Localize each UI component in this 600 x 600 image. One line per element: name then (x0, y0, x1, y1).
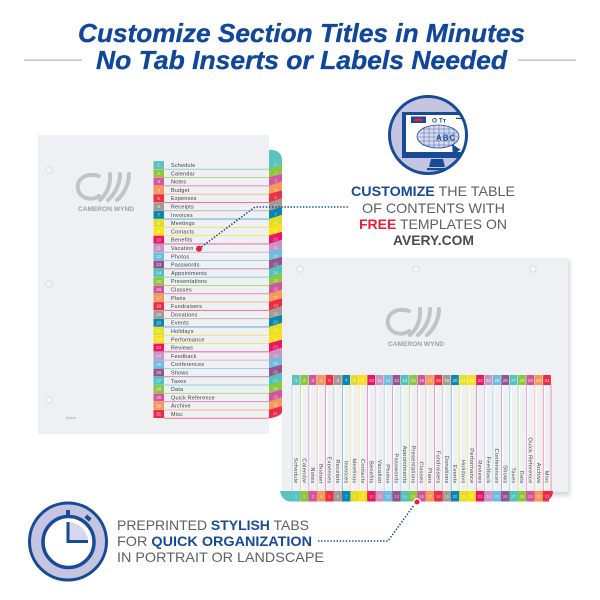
landscape tabs: 24 (486, 378, 492, 383)
portrait table of contents rows: 19 (273, 311, 278, 316)
portrait table of contents rows: Holidays (171, 329, 194, 335)
landscape tabs: 3 (311, 378, 314, 383)
landscape tabs: Reviews (476, 460, 482, 484)
landscape tabs: Archive (535, 463, 541, 484)
arrow: dotted leader from Vacation to customize text (199, 207, 348, 249)
landscape tabs: 22 (469, 378, 475, 383)
landscape tabs: Fundraisers (434, 451, 440, 484)
portrait table of contents rows: 3 (157, 179, 160, 184)
portrait table of contents rows: 28 (156, 387, 162, 392)
portrait table of contents rows: Misc (171, 412, 183, 418)
portrait table of contents rows: 21 (156, 329, 162, 334)
landscape tabs: 24 (486, 494, 492, 499)
logo: landscape: CAMERON WYND (388, 341, 444, 348)
portrait table of contents rows: Presentations (171, 279, 207, 285)
portrait table of contents rows: 18 (273, 303, 278, 308)
portrait table of contents rows: 5 (157, 196, 160, 201)
landscape tabs: 9 (362, 494, 365, 499)
landscape tabs: Feedback (485, 457, 491, 484)
portrait table of contents rows: Fundraisers (171, 304, 202, 310)
portrait table of contents rows: 30 (156, 403, 162, 408)
landscape tabs: 1 (295, 378, 298, 383)
landscape tabs: 28 (520, 494, 525, 499)
landscape tabs: Budget (317, 464, 323, 484)
landscape tabs: 20 (453, 494, 458, 499)
portrait table of contents rows: 19 (156, 312, 162, 317)
portrait table of contents rows: Vacation (171, 246, 194, 252)
portrait table of contents rows: Notes (171, 180, 186, 186)
landscape tabs: Classes (418, 462, 424, 484)
icon: stopwatch (30, 503, 106, 580)
landscape tabs: Receipts (334, 459, 340, 484)
portrait table of contents rows: 23 (156, 345, 162, 350)
landscape tabs: Contacts (359, 459, 365, 484)
portrait table of contents rows: 21 (273, 328, 278, 333)
landscape tabs: 17 (428, 494, 433, 499)
portrait table of contents rows: Conferences (171, 362, 204, 368)
portrait table of contents rows: 29 (273, 394, 278, 399)
landscape tabs: 13 (394, 378, 399, 383)
landscape tabs: 20 (452, 378, 458, 383)
panel: portrait divider (38, 135, 282, 434)
landscape tabs: 8 (353, 378, 356, 383)
portrait table of contents rows: Benefits (171, 238, 193, 244)
landscape tabs: Presentations (409, 445, 415, 484)
portrait table of contents rows: 25 (156, 362, 162, 367)
landscape tabs: 1 (295, 494, 298, 499)
landscape tabs: 10 (369, 378, 374, 383)
portrait table of contents rows: 31 (273, 411, 278, 416)
portrait table of contents rows: 13 (273, 262, 278, 267)
text: customize callout: FREE TEMPLATES ON (359, 216, 507, 232)
arrow: dotted leader from tabs callout to bottom tab (318, 505, 414, 541)
landscape tabs: 19 (444, 378, 450, 383)
portrait table of contents rows: Reviews (171, 346, 193, 352)
landscape tabs: 14 (402, 494, 408, 499)
portrait table of contents rows: 4 (157, 187, 160, 192)
portrait table of contents rows: 16 (156, 287, 162, 292)
text: stylish tabs callout (117, 517, 324, 565)
landscape tabs: 12 (386, 378, 391, 383)
landscape tabs: Conferences (493, 448, 499, 484)
landscape tabs: Quick Reference (526, 437, 532, 484)
landscape tabs: 11 (377, 378, 383, 383)
text: customize callout (351, 183, 515, 248)
landscape tabs: Meetings (351, 458, 357, 484)
icon: computer monitor: O Tт (432, 118, 446, 124)
logo: portrait (78, 174, 134, 213)
portrait table of contents rows: 11 (156, 246, 162, 251)
portrait table of contents rows: Donations (171, 312, 198, 318)
portrait table of contents rows: 17 (273, 295, 278, 300)
portrait table of contents rows: 24 (273, 353, 278, 358)
landscape tabs: 16 (419, 378, 425, 383)
marker: red dot on Vacation (196, 246, 202, 252)
landscape tabs (280, 375, 553, 502)
portrait table of contents rows: Plans (171, 296, 186, 302)
landscape tabs: Data (518, 470, 524, 484)
portrait table of contents rows: 1 (274, 162, 277, 167)
portrait table of contents rows: 17 (156, 295, 162, 300)
landscape tabs: Shows (501, 465, 507, 484)
portrait table of contents rows: Contacts (171, 229, 194, 235)
portrait table of contents rows: Shows (171, 370, 188, 376)
landscape tabs: 29 (528, 378, 533, 383)
text: customize callout: AVERY.COM (393, 232, 474, 248)
portrait table of contents rows: 13 (156, 262, 162, 267)
landscape tabs: 30 (536, 378, 542, 383)
landscape tabs: 18 (436, 378, 441, 383)
portrait table of contents rows: Meetings (171, 221, 195, 227)
portrait table of contents rows: Events (171, 321, 189, 327)
portrait table of contents rows: Data (171, 387, 183, 393)
landscape tabs: 23 (478, 378, 483, 383)
landscape tabs: Misc (543, 471, 549, 484)
portrait table of contents rows: 27 (273, 378, 278, 383)
logo: landscape (388, 309, 444, 348)
landscape tabs: 28 (519, 378, 525, 383)
landscape tabs: 22 (469, 494, 475, 499)
portrait table of contents rows: Archive (171, 404, 191, 410)
portrait table of contents rows: 12 (273, 253, 278, 258)
portrait table of contents rows: 8 (157, 221, 160, 226)
portrait table of contents rows: Budget (171, 188, 190, 194)
landscape tabs: 7 (345, 494, 348, 499)
portrait table of contents rows: Passwords (171, 263, 200, 269)
portrait table of contents rows: 22 (156, 337, 162, 342)
portrait table of contents rows: Feedback (171, 354, 197, 360)
portrait table of contents rows: 24 (156, 353, 162, 358)
landscape tabs: 21 (461, 494, 466, 499)
text: customize callout: OF CONTENTS WITH (362, 200, 505, 216)
portrait table of contents rows: Photos (171, 254, 189, 260)
landscape tabs: 15 (411, 494, 416, 499)
landscape tabs: Donations (443, 456, 449, 484)
text: customize callout: CUSTOMIZE THE TABLE (351, 183, 515, 199)
portrait table of contents rows: 14 (156, 270, 162, 275)
portrait table of contents rows: 16 (273, 286, 278, 292)
landscape tabs: Notes (309, 467, 315, 484)
landscape tabs: 26 (503, 494, 508, 499)
portrait table of contents rows: 29 (156, 395, 162, 400)
landscape tabs: Appointments (401, 446, 407, 484)
portrait table of contents rows: 25 (273, 361, 278, 366)
landscape tabs: 15 (411, 378, 416, 383)
portrait table of contents rows: 2 (157, 171, 160, 176)
portrait table of contents rows: Invoices (171, 213, 193, 219)
portrait table of contents rows: 7 (274, 212, 277, 217)
portrait table of contents rows: Appointments (171, 271, 207, 277)
portrait table of contents rows: 27 (156, 378, 162, 383)
landscape tabs: 13 (394, 494, 399, 499)
portrait table of contents rows: Quick Reference (171, 395, 215, 401)
landscape tabs: Photos (384, 464, 390, 484)
portrait table of contents rows: 15 (156, 279, 162, 284)
portrait table of contents rows (154, 150, 282, 419)
portrait table of contents rows: 15 (273, 278, 278, 283)
portrait table of contents rows: Taxes (171, 379, 186, 385)
landscape tabs: 27 (511, 378, 517, 383)
portrait table of contents rows: 9 (157, 229, 160, 234)
landscape tabs: 2 (303, 494, 306, 499)
landscape tabs: 26 (503, 378, 508, 383)
landscape tabs: 5 (328, 494, 331, 499)
portrait table of contents rows: 14 (273, 270, 278, 275)
portrait table of contents rows: 10 (273, 237, 278, 242)
portrait table of contents rows: 5 (274, 195, 277, 200)
landscape tabs: 25 (495, 494, 500, 499)
small brand mark: Avery (66, 415, 76, 420)
landscape tabs: 23 (478, 494, 483, 499)
landscape tabs: Passwords (393, 453, 399, 484)
landscape tabs: 17 (427, 378, 433, 383)
portrait table of contents rows: 10 (156, 237, 162, 242)
landscape tabs: 5 (328, 378, 331, 383)
landscape tabs: 29 (528, 494, 533, 499)
text: stylish tabs callout: FOR QUICK ORGANIZATION (117, 533, 312, 549)
portrait table of contents rows: 2 (274, 170, 277, 175)
landscape tabs: 9 (362, 378, 365, 383)
icon: computer monitor: ABC (436, 134, 456, 142)
landscape tabs: 30 (536, 494, 542, 499)
landscape tabs: 21 (461, 378, 466, 383)
portrait table of contents rows: 23 (273, 345, 278, 350)
portrait table of contents rows: 31 (156, 412, 162, 417)
marker: red dot on bottom tab (414, 499, 420, 505)
title: Customize Section Titles in Minutes (78, 18, 525, 48)
panel: landscape divider (280, 258, 570, 502)
portrait table of contents rows: Calendar (171, 171, 195, 177)
portrait table of contents rows: 9 (274, 228, 277, 233)
portrait table of contents rows: 6 (274, 204, 277, 208)
landscape tabs: Invoices (342, 461, 348, 484)
portrait table of contents rows: 1 (157, 163, 160, 168)
portrait table of contents rows: 28 (273, 386, 278, 391)
portrait table of contents rows: 6 (157, 204, 160, 209)
landscape tabs: 31 (545, 494, 550, 499)
portrait table of contents rows: 22 (273, 336, 278, 341)
landscape tabs: Holidays (459, 460, 465, 484)
portrait table of contents rows: Receipts (171, 204, 194, 210)
portrait table of contents rows: Performance (171, 337, 205, 343)
portrait table of contents rows: Schedule (171, 163, 195, 169)
landscape tabs: 10 (369, 494, 374, 499)
landscape tabs: 6 (337, 494, 340, 499)
landscape tabs: 27 (511, 494, 517, 499)
landscape tabs: 25 (494, 378, 500, 383)
icon: computer monitor (390, 96, 472, 174)
landscape tabs: Benefits (367, 461, 373, 484)
portrait table of contents rows: Expenses (171, 196, 197, 202)
landscape tabs: 31 (545, 378, 550, 383)
portrait table of contents rows: 20 (273, 320, 278, 325)
landscape tabs: Calendar (300, 458, 306, 484)
landscape tabs: Performance (468, 448, 474, 484)
portrait table of contents rows: 12 (156, 254, 162, 259)
landscape tabs: 4 (320, 378, 323, 383)
landscape tabs: 11 (378, 494, 383, 499)
portrait table of contents rows: 30 (273, 403, 278, 408)
landscape tabs: 14 (402, 378, 408, 383)
portrait table of contents rows: 26 (156, 370, 162, 375)
landscape tabs: Taxes (510, 467, 516, 484)
landscape tabs: 18 (436, 494, 441, 499)
landscape tabs: Expenses (326, 457, 332, 484)
portrait table of contents rows: 7 (157, 212, 160, 217)
title (24, 18, 576, 75)
landscape tabs: 2 (303, 378, 306, 383)
text: stylish tabs callout: IN PORTRAIT OR LANDSCAPE (117, 549, 324, 565)
landscape tabs: 8 (353, 494, 356, 499)
landscape tabs: Events (451, 465, 457, 484)
landscape tabs: 19 (444, 494, 450, 499)
landscape tabs: 4 (320, 494, 323, 499)
portrait table of contents rows: 26 (273, 370, 278, 374)
portrait table of contents rows: Classes (171, 288, 192, 294)
portrait table of contents rows: 20 (156, 320, 162, 325)
portrait table of contents rows: 18 (156, 304, 162, 309)
landscape tabs: 7 (345, 378, 348, 383)
title: No Tab Inserts or Labels Needed (96, 45, 508, 75)
landscape tabs: 3 (312, 494, 315, 499)
landscape tabs: Schedule (292, 458, 298, 484)
landscape tabs: Plans (426, 468, 432, 484)
portrait table of contents rows: 8 (274, 220, 277, 225)
logo: portrait: CAMERON WYND (78, 206, 134, 213)
landscape tabs: 16 (419, 494, 425, 499)
text: stylish tabs callout: PREPRINTED STYLISH TABS (117, 517, 309, 533)
landscape tabs: 12 (386, 494, 391, 499)
landscape tabs: 6 (337, 378, 340, 383)
landscape tabs: Vacation (376, 460, 382, 484)
portrait table of contents rows: 4 (274, 187, 277, 192)
portrait table of contents rows: 11 (273, 245, 278, 250)
portrait table of contents rows: 3 (274, 179, 277, 184)
